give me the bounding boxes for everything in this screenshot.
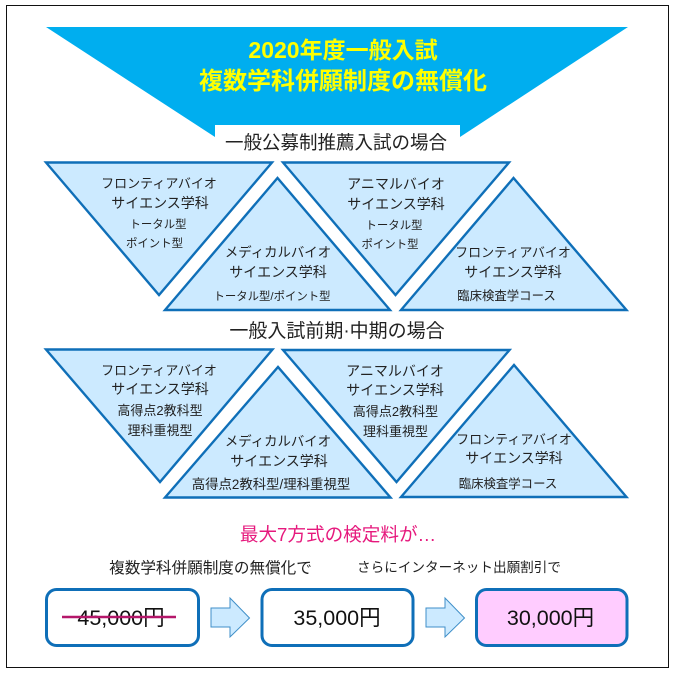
panel: recommendation animal: トータル型 (366, 218, 422, 232)
strikethrough (62, 616, 176, 618)
panel: recommendation frontier: サイエンス学科 (111, 195, 209, 211)
panel: general frontier: 高得点2教科型 (117, 403, 203, 418)
panel: recommendation frontier clinical (401, 178, 626, 310)
panel: recommendation frontier: トータル型 (130, 217, 186, 231)
panel: general frontier: 理科重視型 (127, 423, 193, 438)
panel: recommendation animal: ポイント型 (362, 237, 418, 251)
price box: 35,000: 35,000円 (293, 606, 381, 630)
panel: recommendation frontier: ポイント型 (126, 236, 183, 250)
panel: general animal (283, 350, 510, 482)
panel: recommendation frontier clinical: フロンティアバイオ (455, 245, 571, 260)
panel: general medical (165, 367, 390, 498)
panel: general frontier clinical: 臨床検査学コース (459, 476, 557, 491)
price box: 45,000: 45,000円 (77, 606, 165, 630)
title: 複数学科併願制度の無償化 (199, 68, 487, 95)
price box: 30,000: 30,000円 (507, 606, 594, 630)
panel: recommendation frontier clinical: サイエンス学科 (464, 264, 562, 280)
panel: recommendation medical (165, 178, 390, 310)
panel: general animal: 高得点2教科型 (353, 404, 438, 419)
panel: general medical: サイエンス学科 (230, 453, 328, 469)
panel: general frontier clinical: サイエンス学科 (465, 450, 563, 466)
callout: up to seven methods: 最大7方式の検定料が… (240, 524, 436, 545)
header banner (46, 27, 628, 137)
title: 2020年度一般入試 (248, 37, 438, 63)
panel: recommendation medical: トータル型/ポイント型 (213, 289, 331, 303)
price box: 30,000 (476, 590, 627, 646)
panel: recommendation frontier (46, 162, 272, 295)
heading: general exam: 一般入試前期·中期の場合 (229, 320, 445, 342)
price box: 35,000 (262, 590, 413, 646)
panel: recommendation animal: サイエンス学科 (347, 196, 445, 212)
panel: recommendation frontier clinical: 臨床検査学コース (457, 288, 556, 303)
arrow 1 (211, 598, 250, 637)
panel: general animal: 理科重視型 (363, 424, 428, 439)
panel: general animal: サイエンス学科 (346, 382, 444, 398)
panel: recommendation medical: メディカルバイオ (225, 244, 331, 260)
price box: 45,000 (46, 590, 198, 646)
panel: general frontier: フロンティアバイオ (101, 363, 217, 378)
panel: recommendation medical: サイエンス学科 (229, 264, 327, 280)
panel: general frontier clinical (401, 365, 626, 497)
arrow 2 (426, 598, 464, 637)
caption: internet discount: さらにインターネット出願割引で (357, 560, 561, 575)
panel: general frontier clinical: フロンティアバイオ (456, 432, 572, 447)
panel: recommendation animal (283, 162, 509, 295)
heading: recommendation exam: 一般公募制推薦入試の場合 (225, 132, 447, 153)
panel: general medical: 高得点2教科型/理科重視型 (192, 476, 350, 492)
panel: general animal: アニマルバイオ (346, 363, 444, 379)
panel: general frontier: サイエンス学科 (111, 381, 209, 397)
panel: general medical: メディカルバイオ (225, 433, 331, 449)
panel: recommendation frontier: フロンティアバイオ (101, 176, 217, 191)
caption: waiver: 複数学科併願制度の無償化で (109, 559, 312, 577)
panel: recommendation animal: アニマルバイオ (347, 176, 445, 192)
panel: general frontier (46, 350, 272, 482)
title (199, 37, 487, 95)
